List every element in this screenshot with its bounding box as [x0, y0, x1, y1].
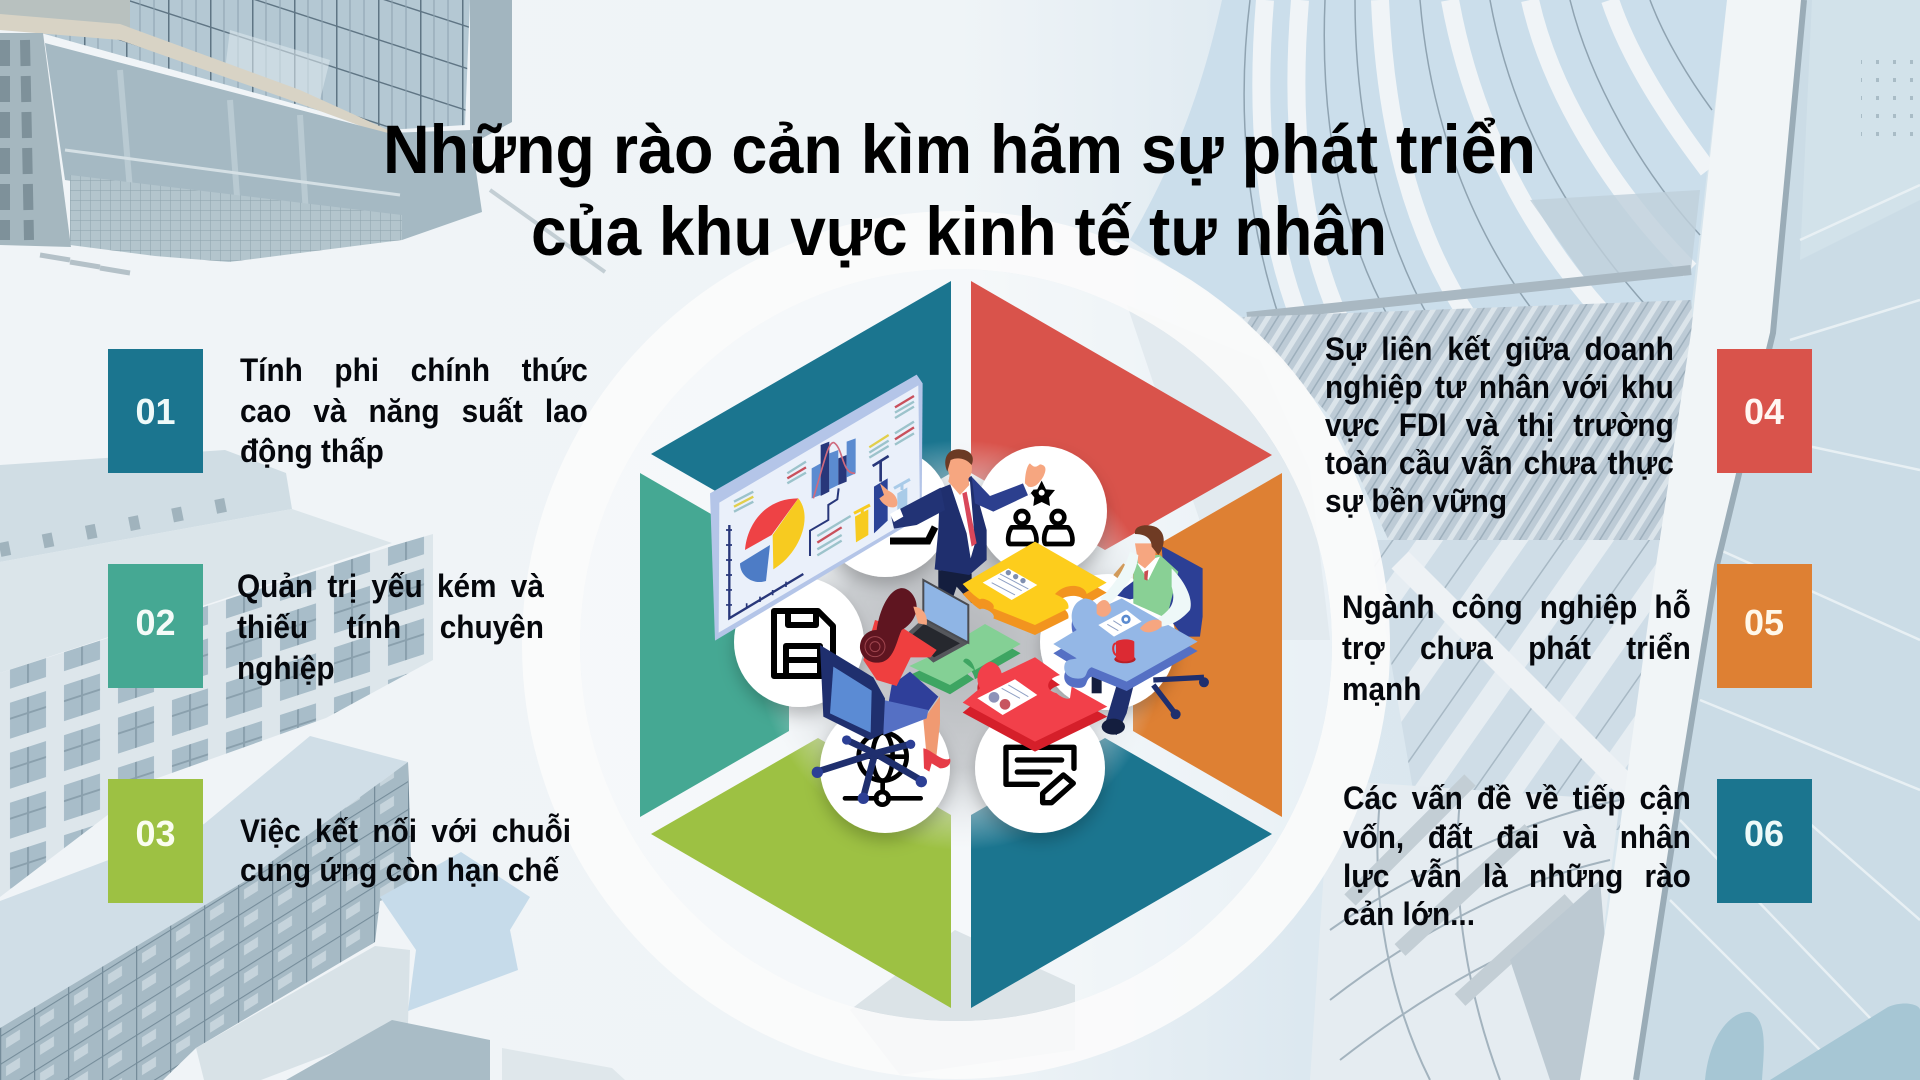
number box 01: [108, 349, 203, 473]
hands and sleeves: [1097, 600, 1111, 617]
lower-left building with window grid: [0, 450, 625, 1080]
text block 04: toàn cầu vẫn chưa thực: [1325, 445, 1674, 481]
text block 05: mạnh: [1342, 671, 1421, 707]
puzzle piece: yellow: [963, 542, 1107, 635]
pie chart: [740, 498, 805, 582]
text block 05: trợ chưa phát triển: [1342, 630, 1691, 666]
icon: arrow behind presenter: [890, 527, 935, 541]
puzzle piece: red: [963, 657, 1107, 752]
vest and head: [1133, 555, 1178, 618]
head: [948, 470, 969, 495]
grey shading at hexagon centre: [755, 440, 1165, 850]
text block 04: Sự liên kết giữa doanh: [1325, 331, 1674, 367]
decorative ring behind hexagon: [551, 240, 1361, 1050]
text block 01: Tính phi chính thức: [240, 352, 588, 388]
right curved tower: [1130, 0, 1727, 1080]
text block 06: lực vẫn là những rào: [1343, 858, 1691, 894]
text block 05: [1342, 589, 1691, 707]
red cup: [1113, 639, 1136, 663]
paper on red piece: [977, 679, 1037, 715]
number box 05: [1717, 564, 1812, 688]
segment: bottom-left green: [651, 738, 951, 1008]
text block 02: Quản trị yếu kém và: [237, 568, 544, 604]
text block 04: vực FDI và thị trường: [1325, 407, 1674, 443]
text block 03: cung ứng còn hạn chế: [240, 852, 559, 888]
title: [383, 111, 1536, 270]
text block 02: [237, 568, 544, 686]
number box 06: 06: [1744, 813, 1784, 854]
top-left building: [0, 0, 605, 273]
chair back and seat: [883, 700, 928, 735]
building behind hexagon bottom: [850, 930, 1075, 1075]
illustration: presenter man: [879, 449, 1045, 603]
segment: right orange: [1133, 473, 1282, 817]
white icon circles: [734, 446, 1176, 833]
paper on table: [1098, 610, 1142, 637]
illustration: woman at laptop in blue chair: [812, 580, 968, 804]
text block 04: nghiệp tư nhân với khu: [1325, 369, 1674, 405]
skirt: [883, 672, 938, 733]
chair base: [812, 735, 927, 804]
number box 01: 01: [135, 391, 176, 432]
text block 04: [1325, 331, 1674, 519]
number box 03: 03: [135, 813, 176, 854]
number box 05: 05: [1744, 602, 1784, 643]
number box 02: [108, 564, 203, 688]
paper on yellow piece: [983, 568, 1037, 600]
title: của khu vực kinh tế tư nhân: [531, 193, 1387, 270]
puzzle piece: green: [909, 624, 1021, 694]
icon: document with pencil: [1006, 747, 1074, 803]
text block 06: Các vấn đề về tiếp cận: [1343, 780, 1691, 816]
text block 02: thiếu tính chuyên: [237, 609, 544, 645]
text block 03: [240, 813, 571, 888]
icon: floppy disk: [774, 611, 833, 676]
segment: left sea green: [640, 473, 789, 817]
right arm: [972, 477, 1031, 512]
text block 01: động thấp: [240, 433, 384, 469]
hair: [860, 588, 917, 663]
illustration: right man with chair (behind table): [1100, 525, 1209, 719]
segment: top-left teal: [651, 281, 951, 550]
bar chart on board: [812, 438, 856, 498]
icon: people with star: [1008, 481, 1072, 544]
number box 03: [108, 779, 203, 903]
white vertical column and far-right glass: [1580, 0, 1920, 1080]
text block 01: cao và năng suất lao: [240, 393, 588, 429]
trousers: [938, 570, 972, 603]
shirt and jacket: [935, 476, 987, 575]
text block 03: Việc kết nối với chuỗi: [240, 813, 571, 849]
number box 04: [1717, 349, 1812, 473]
icon: globe network: [845, 733, 921, 805]
segment: bottom-right teal: [971, 738, 1272, 1008]
text block 04: sự bền vững: [1325, 483, 1507, 519]
text block 05: Ngành công nghiệp hỗ: [1342, 589, 1691, 625]
text block 06: vốn, đất đai và nhân: [1343, 819, 1691, 855]
table: blue puzzle piece with cup and paper: [1053, 568, 1198, 735]
laptop: [903, 580, 968, 663]
illustration: presentation board: [710, 375, 923, 641]
number box 02: 02: [135, 602, 176, 643]
left arm: [891, 488, 945, 529]
legs and heels: [923, 697, 940, 760]
hexagon of six coloured segments: [640, 281, 1282, 1008]
segment: top-right red: [971, 281, 1272, 550]
text block 06: cản lớn...: [1343, 896, 1475, 932]
text block 01: [240, 352, 588, 469]
number box 04: 04: [1744, 391, 1784, 432]
text block 06: [1343, 780, 1691, 932]
red top: [863, 620, 937, 686]
text block 02: nghiệp: [237, 650, 335, 686]
chair: [1113, 546, 1209, 719]
title: Những rào cản kìm hãm sự phát triển: [383, 111, 1536, 188]
number box 06: [1717, 779, 1812, 903]
